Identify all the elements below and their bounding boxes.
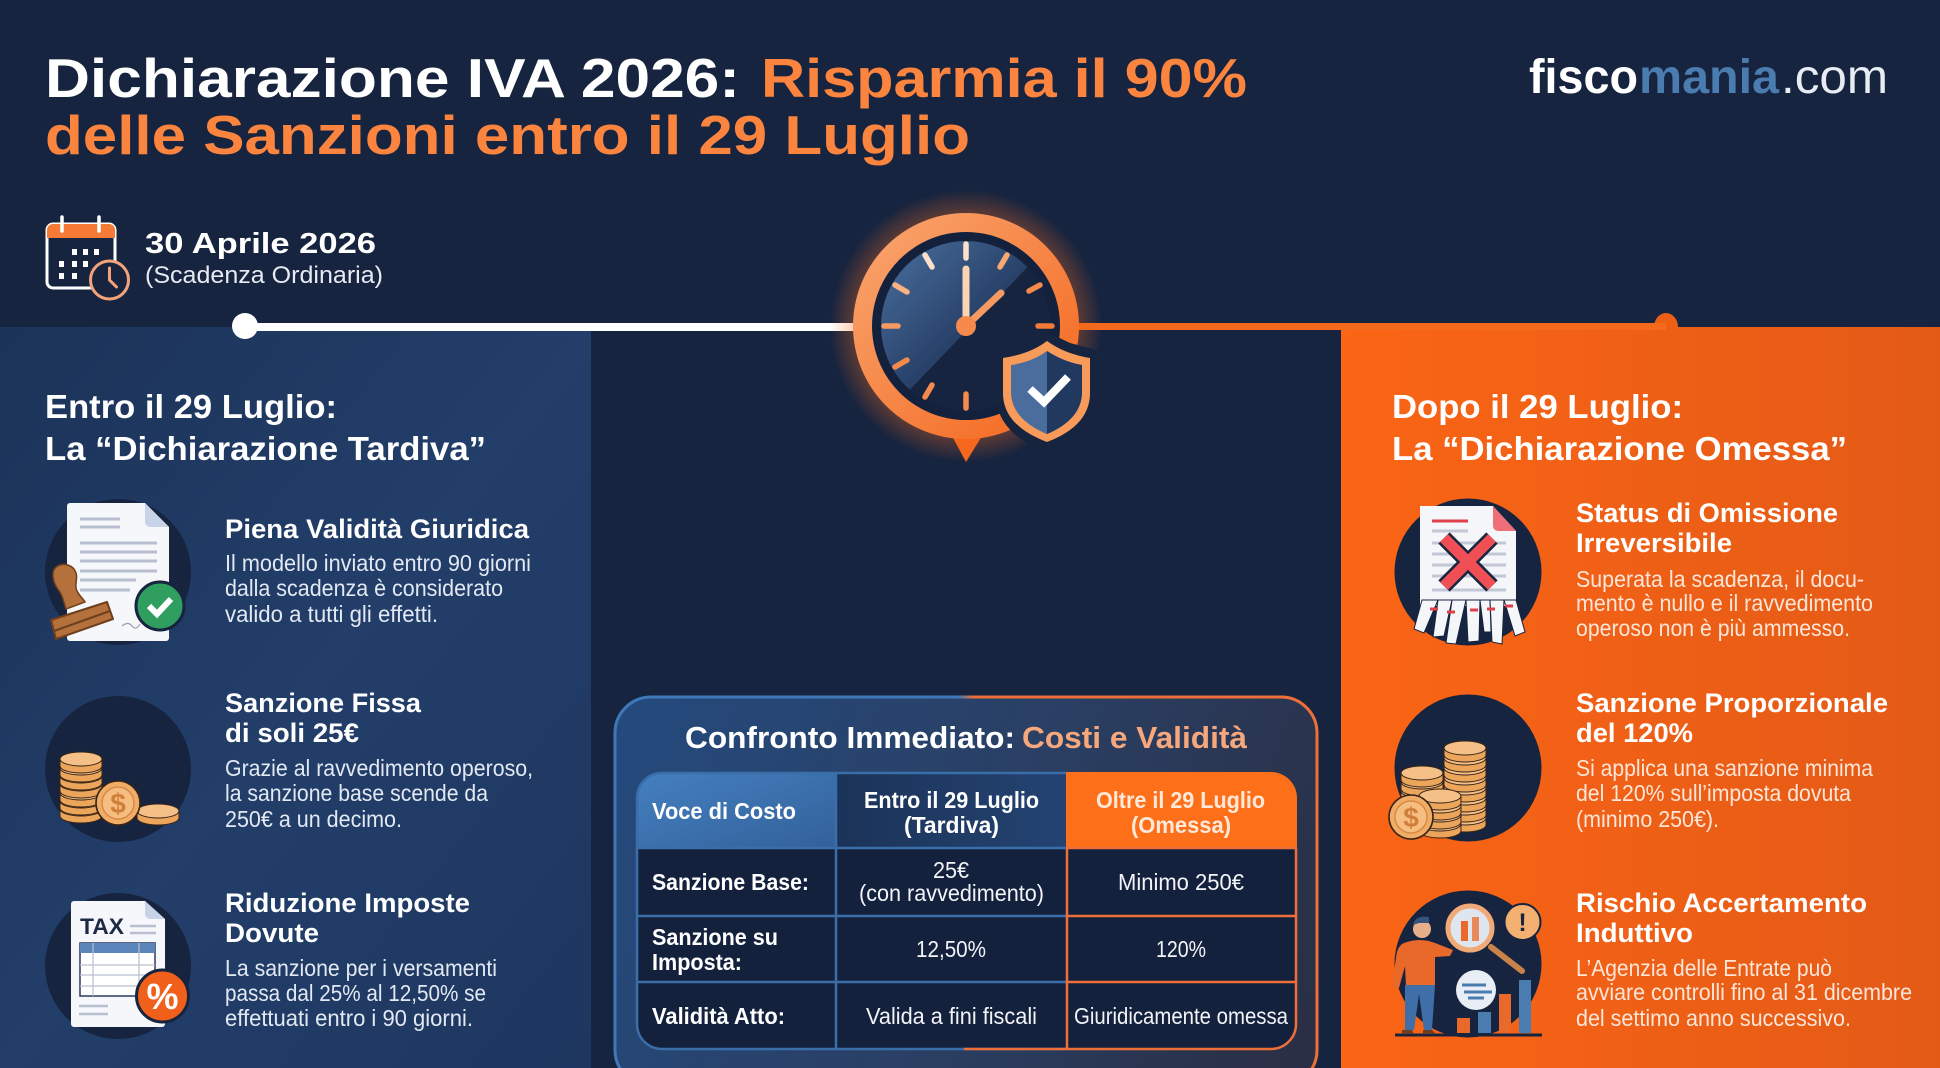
- icon: tax document: %: [146, 976, 179, 1017]
- table header: [652, 787, 1265, 838]
- panel: right background: [1341, 313, 1940, 1068]
- text: sanzione proporzionale: del 120%: [1576, 718, 1693, 748]
- row: validità atto: [652, 1003, 1288, 1029]
- text: sanzione proporzionale: del 120% sull’imposta dovuta: [1576, 780, 1851, 806]
- title: delle Sanzioni entro il 29 Luglio: [45, 104, 970, 166]
- text: rischio accertamento: [1576, 888, 1912, 1031]
- text: riduzione imposte: passa dal 25% al 12,50% se: [225, 980, 486, 1006]
- text: status di omissione: mento è nullo e il ravvedimento: [1576, 590, 1873, 616]
- icon: coins small: [45, 696, 191, 842]
- text: piena validità: valido a tutti gli effetti.: [225, 601, 438, 627]
- row: sanzione base: Sanzione Base:: [652, 869, 809, 895]
- row: sanzione su imposta: Sanzione su: [652, 924, 778, 950]
- text: riduzione imposte: Riduzione Imposte: [225, 888, 470, 918]
- icon: tax document: [45, 893, 191, 1039]
- text: status di omissione: Superata la scadenza, il docu-: [1576, 566, 1864, 592]
- row: validità atto: Validità Atto:: [652, 1003, 785, 1029]
- table header: Voce di Costo: [652, 798, 796, 824]
- date: ordinary deadline: 30 Aprile 2026: [145, 228, 376, 260]
- logo: .com: [1781, 51, 1888, 104]
- table header: (Tardiva): [904, 812, 999, 838]
- text: piena validità: [225, 514, 531, 627]
- title: [45, 47, 1247, 166]
- panel: right heading: Dopo il 29 Luglio:: [1392, 388, 1683, 425]
- table grid: [636, 772, 1297, 1050]
- text: riduzione imposte: Dovute: [225, 918, 319, 948]
- row: sanzione su imposta: [652, 924, 1206, 975]
- comparison heading: Costi e Validità: [1022, 720, 1248, 755]
- text: piena validità: Il modello inviato entro 90 giorni: [225, 550, 531, 576]
- text: status di omissione: Irreversibile: [1576, 528, 1732, 558]
- icon: stamped valid document: [45, 499, 191, 645]
- panel: comparison table: [615, 697, 1317, 1068]
- panel: left heading: La “Dichiarazione Tardiva”: [45, 430, 486, 467]
- panel: left heading: Entro il 29 Luglio:: [45, 388, 337, 425]
- icon: audit risk: [1392, 890, 1542, 1038]
- row: validità atto: Valida a fini fiscali: [866, 1003, 1037, 1029]
- text: sanzione proporzionale: Si applica una sanzione minima: [1576, 755, 1873, 781]
- text: riduzione imposte: effettuati entro i 90 giorni.: [225, 1005, 473, 1031]
- panel: right heading: [1392, 388, 1847, 467]
- text: rischio accertamento: Rischio Accertamento: [1576, 888, 1867, 918]
- text: rischio accertamento: L’Agenzia delle Entrate può: [1576, 955, 1832, 981]
- row: sanzione base: 25€: [933, 857, 969, 883]
- icon: shredded document: [1394, 498, 1542, 646]
- text: sanzione proporzionale: Sanzione Proporzionale: [1576, 688, 1888, 718]
- title: Risparmia il 90%: [761, 47, 1247, 109]
- icon: coins large: [1389, 694, 1542, 842]
- text: status di omissione: Status di Omissione: [1576, 498, 1838, 528]
- panel: left heading: [45, 388, 486, 467]
- panel: left background: [0, 327, 591, 1068]
- icon: tax document: TAX: [80, 914, 124, 939]
- icon: audit risk: !: [1518, 909, 1527, 937]
- logo: mania: [1639, 51, 1779, 104]
- row: sanzione base: (con ravvedimento): [859, 880, 1044, 906]
- timeline: orange segment: [1070, 323, 1666, 330]
- row: validità atto: Giuridicamente omessa: [1074, 1003, 1288, 1029]
- text: riduzione imposte: La sanzione per i versamenti: [225, 955, 497, 981]
- text: sanzione fissa: [225, 688, 533, 832]
- row: sanzione base: Minimo 250€: [1118, 869, 1244, 895]
- text: sanzione fissa: di soli 25€: [225, 718, 359, 748]
- text: piena validità: Piena Validità Giuridica: [225, 514, 530, 544]
- text: riduzione imposte: [225, 888, 497, 1031]
- date: ordinary deadline: [145, 228, 383, 289]
- panel: right heading: La “Dichiarazione Omessa”: [1392, 430, 1847, 467]
- text: sanzione fissa: la sanzione base scende da: [225, 780, 488, 806]
- text: sanzione proporzionale: [1576, 688, 1888, 832]
- icon: central clock with shield: [830, 190, 1102, 462]
- logo: [1529, 51, 1888, 104]
- text: sanzione fissa: Grazie al ravvedimento operoso,: [225, 755, 533, 781]
- row: sanzione su imposta: 12,50%: [916, 936, 986, 962]
- timeline: white segment: [232, 313, 860, 339]
- row: sanzione su imposta: Imposta:: [652, 949, 742, 975]
- text: rischio accertamento: Induttivo: [1576, 918, 1693, 948]
- row: sanzione base: [652, 857, 1244, 906]
- title: Dichiarazione IVA 2026:: [45, 47, 740, 109]
- text: rischio accertamento: avviare controlli fino al 31 dicembre: [1576, 979, 1912, 1005]
- text: status di omissione: [1576, 498, 1873, 641]
- text: rischio accertamento: del settimo anno successivo.: [1576, 1005, 1851, 1031]
- text: piena validità: dalla scadenza è considerato: [225, 575, 503, 601]
- text: sanzione fissa: Sanzione Fissa: [225, 688, 422, 718]
- text: status di omissione: operoso non è più ammesso.: [1576, 615, 1850, 641]
- table header: (Omessa): [1131, 812, 1231, 838]
- row: sanzione su imposta: 120%: [1156, 936, 1206, 962]
- text: sanzione proporzionale: (minimo 250€).: [1576, 806, 1719, 832]
- table header: Entro il 29 Luglio: [864, 787, 1039, 813]
- date: ordinary deadline: (Scadenza Ordinaria): [145, 262, 383, 289]
- table header: Oltre il 29 Luglio: [1096, 787, 1265, 813]
- logo: fisco: [1529, 51, 1638, 104]
- comparison heading: Confronto Immediato:: [685, 720, 1015, 755]
- text: sanzione fissa: 250€ a un decimo.: [225, 806, 402, 832]
- comparison heading: [685, 720, 1248, 755]
- icon: calendar: [47, 217, 128, 299]
